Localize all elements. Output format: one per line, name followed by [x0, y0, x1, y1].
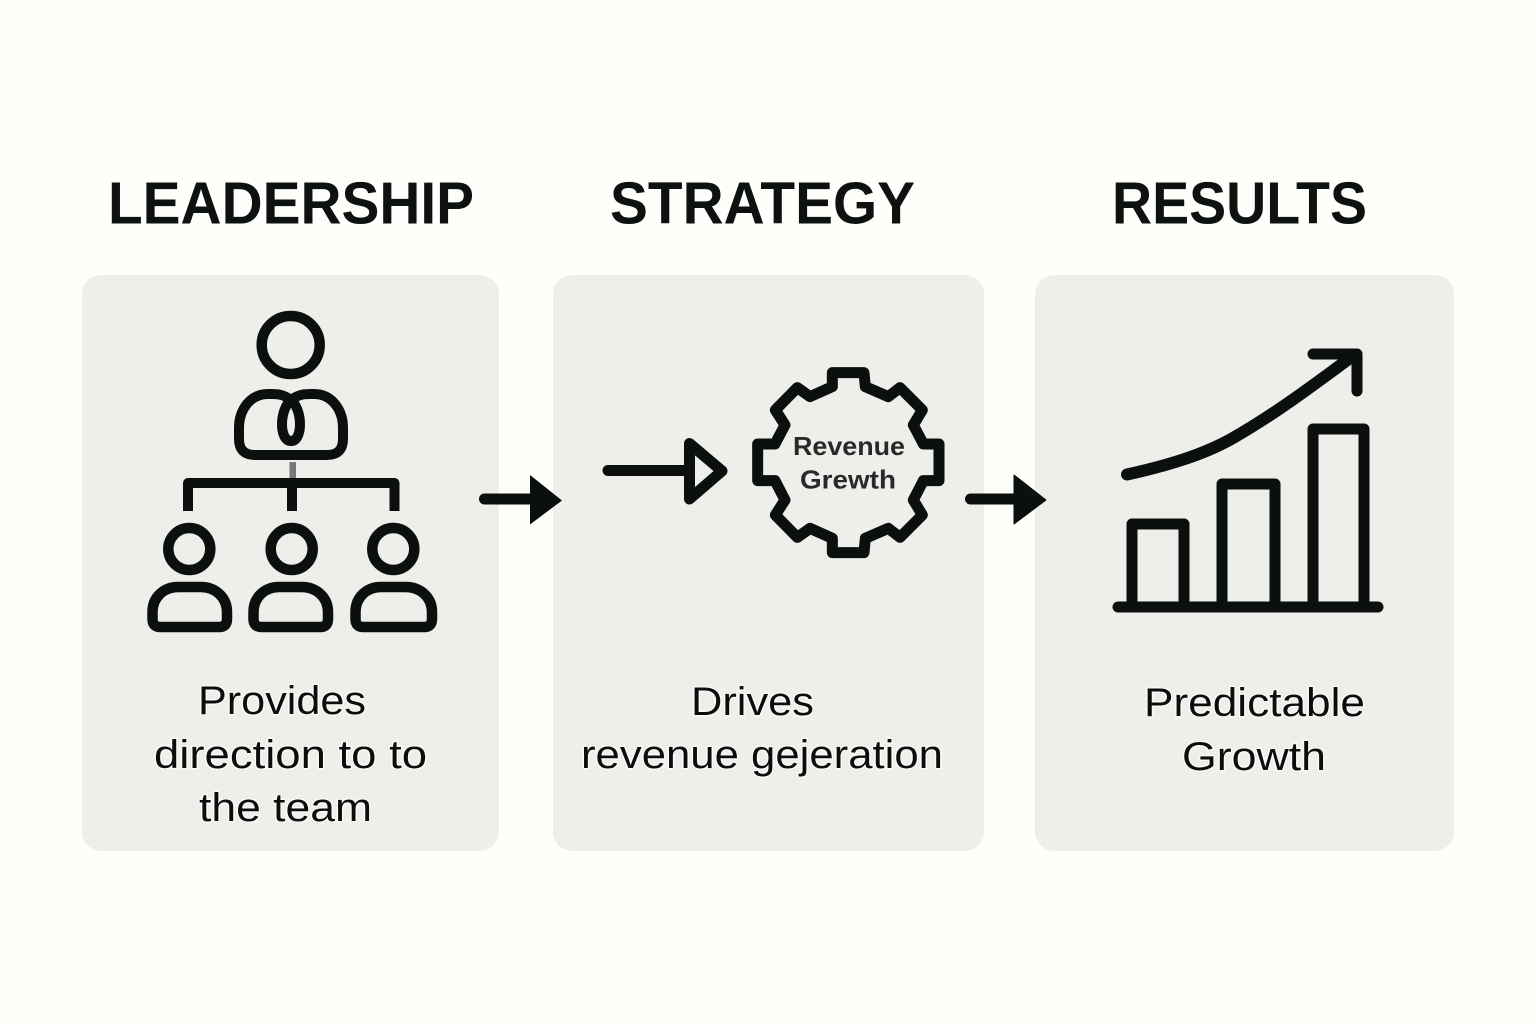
- description: results: Predictable: [1144, 681, 1365, 725]
- leader head: [262, 316, 320, 374]
- arrow: leadership to strategy: [484, 475, 562, 524]
- description: leadership: [154, 679, 427, 830]
- baseline: [1118, 602, 1378, 612]
- growth trend arrow: [1127, 354, 1357, 474]
- team member left: [152, 528, 227, 627]
- leader body with tie loop: [239, 394, 343, 455]
- description: results: Growth: [1182, 735, 1326, 779]
- description: strategy: Drives: [691, 680, 814, 724]
- org chart branch lines: [188, 483, 394, 511]
- icon: growth bar chart: [1118, 354, 1378, 607]
- panel: results: [1035, 275, 1454, 851]
- panel: leadership: [82, 275, 499, 851]
- bar 1: [1132, 524, 1184, 607]
- gear label: Revenue: [793, 431, 905, 461]
- team member right: [356, 528, 432, 627]
- heading: strategy: STRATEGY: [610, 170, 915, 236]
- arrow: strategy to results: [970, 475, 1046, 524]
- team member centre: [254, 528, 328, 627]
- grey connector: [290, 462, 296, 479]
- description: leadership: the team: [199, 786, 372, 830]
- panel: strategy: [553, 275, 984, 851]
- heading: leadership: LEADERSHIP: [108, 170, 474, 236]
- icon: organisation hierarchy: [152, 316, 432, 627]
- bar 3: [1313, 429, 1364, 607]
- description: leadership: direction to to: [154, 733, 427, 777]
- icon: gear: [758, 373, 939, 553]
- description: strategy: [581, 680, 943, 777]
- icon: gear: Grewth: [800, 464, 896, 494]
- heading: results: RESULTS: [1112, 170, 1367, 236]
- description: strategy: revenue gejeration: [581, 733, 943, 777]
- description: results: [1144, 681, 1365, 779]
- icon: small outline arrow: [608, 444, 722, 499]
- bar 2: [1222, 484, 1275, 607]
- description: leadership: Provides: [198, 679, 366, 723]
